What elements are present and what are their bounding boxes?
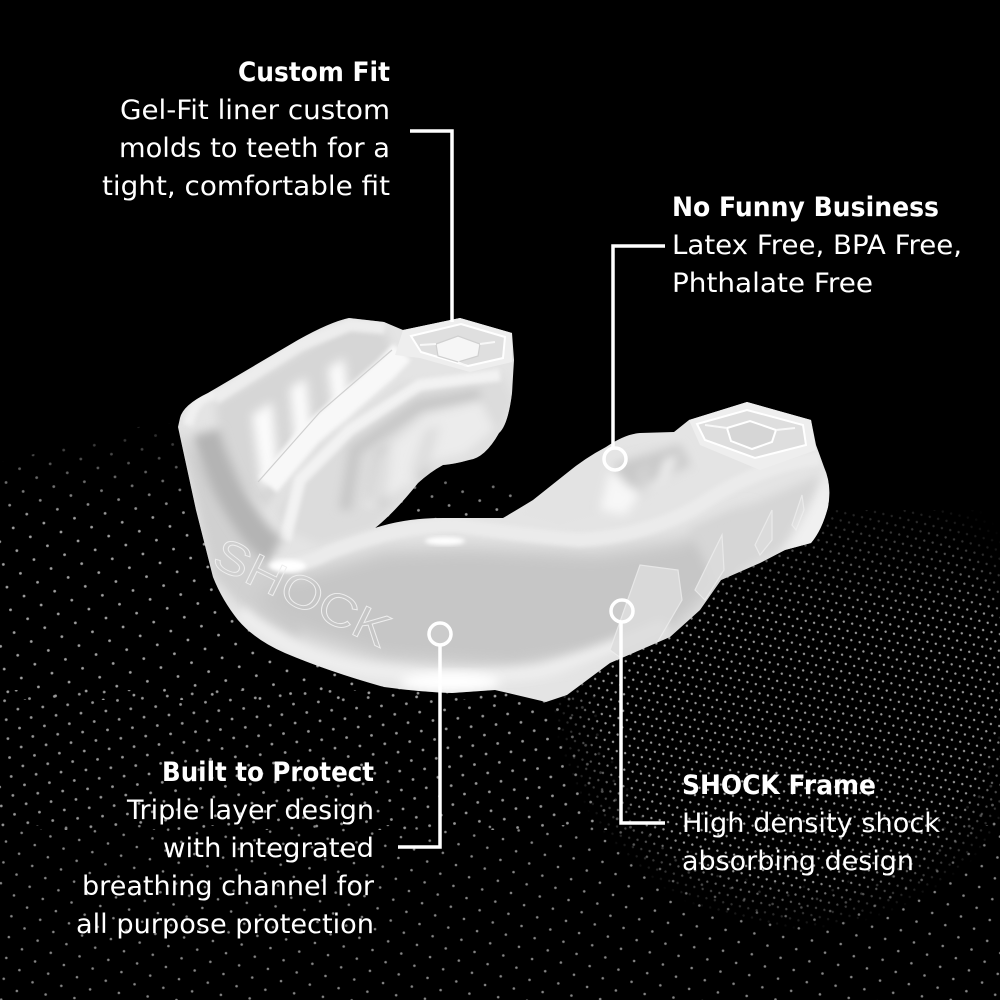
leader: SHOCK Frame [611, 600, 665, 823]
hexagon right [689, 402, 816, 470]
text: Custom Fit: molds to teeth for a [119, 133, 390, 164]
right arm interior [538, 462, 582, 496]
text: SHOCK Frame [682, 770, 940, 877]
callout: No Funny Business [604, 192, 962, 470]
mouthguard [170, 310, 840, 710]
rim left tube [206, 432, 275, 550]
back top edge [215, 325, 385, 398]
back arm interior [218, 332, 390, 504]
bottom lip [240, 612, 665, 677]
text: No Funny Business [672, 192, 962, 299]
text: SHOCK Frame: absorbing design [682, 846, 914, 877]
text: Built to Protect: Triple layer design [126, 795, 374, 826]
text: Built to Protect: breathing channel for [82, 871, 375, 902]
text: Custom Fit: tight, comfortable fit [102, 171, 390, 202]
callout: SHOCK Frame [611, 600, 940, 877]
callout: Built to Protect [76, 623, 451, 940]
guard base [170, 310, 840, 710]
text: No Funny Business: No Funny Business [672, 192, 939, 223]
rim highlights [270, 560, 306, 572]
text: Built to Protect: Built to Protect [162, 757, 374, 788]
leader: Built to Protect [398, 623, 451, 847]
text: SHOCK Frame: High density shock [682, 808, 940, 839]
leader: No Funny Business [604, 246, 665, 470]
right end shade [699, 480, 816, 585]
hexagon left [395, 318, 512, 372]
text: Custom Fit [102, 57, 390, 202]
inner ridge [268, 352, 402, 485]
embossed SHOCK wordmark: SHOCK [206, 527, 400, 657]
text: Custom Fit: Custom Fit [238, 57, 390, 88]
text: Custom Fit: Gel-Fit liner custom [120, 95, 390, 126]
text: Built to Protect: with integrated [163, 833, 374, 864]
text: Built to Protect: all purpose protection [76, 909, 374, 940]
text: No Funny Business: Latex Free, BPA Free, [672, 230, 962, 261]
callout: Custom Fit [102, 57, 452, 322]
front panel [274, 533, 731, 668]
back arm stripes [252, 358, 350, 490]
leader: Custom Fit [410, 131, 452, 322]
right end side [780, 472, 830, 553]
left outer band [178, 427, 300, 640]
text: Built to Protect [76, 757, 375, 940]
text: SHOCK Frame: SHOCK Frame [682, 770, 876, 801]
text: No Funny Business: Phthalate Free [672, 268, 873, 299]
front rim [270, 458, 820, 564]
dotted wave background [0, 418, 1000, 1000]
inner channel [300, 385, 512, 533]
side hexagon windows [610, 495, 804, 672]
